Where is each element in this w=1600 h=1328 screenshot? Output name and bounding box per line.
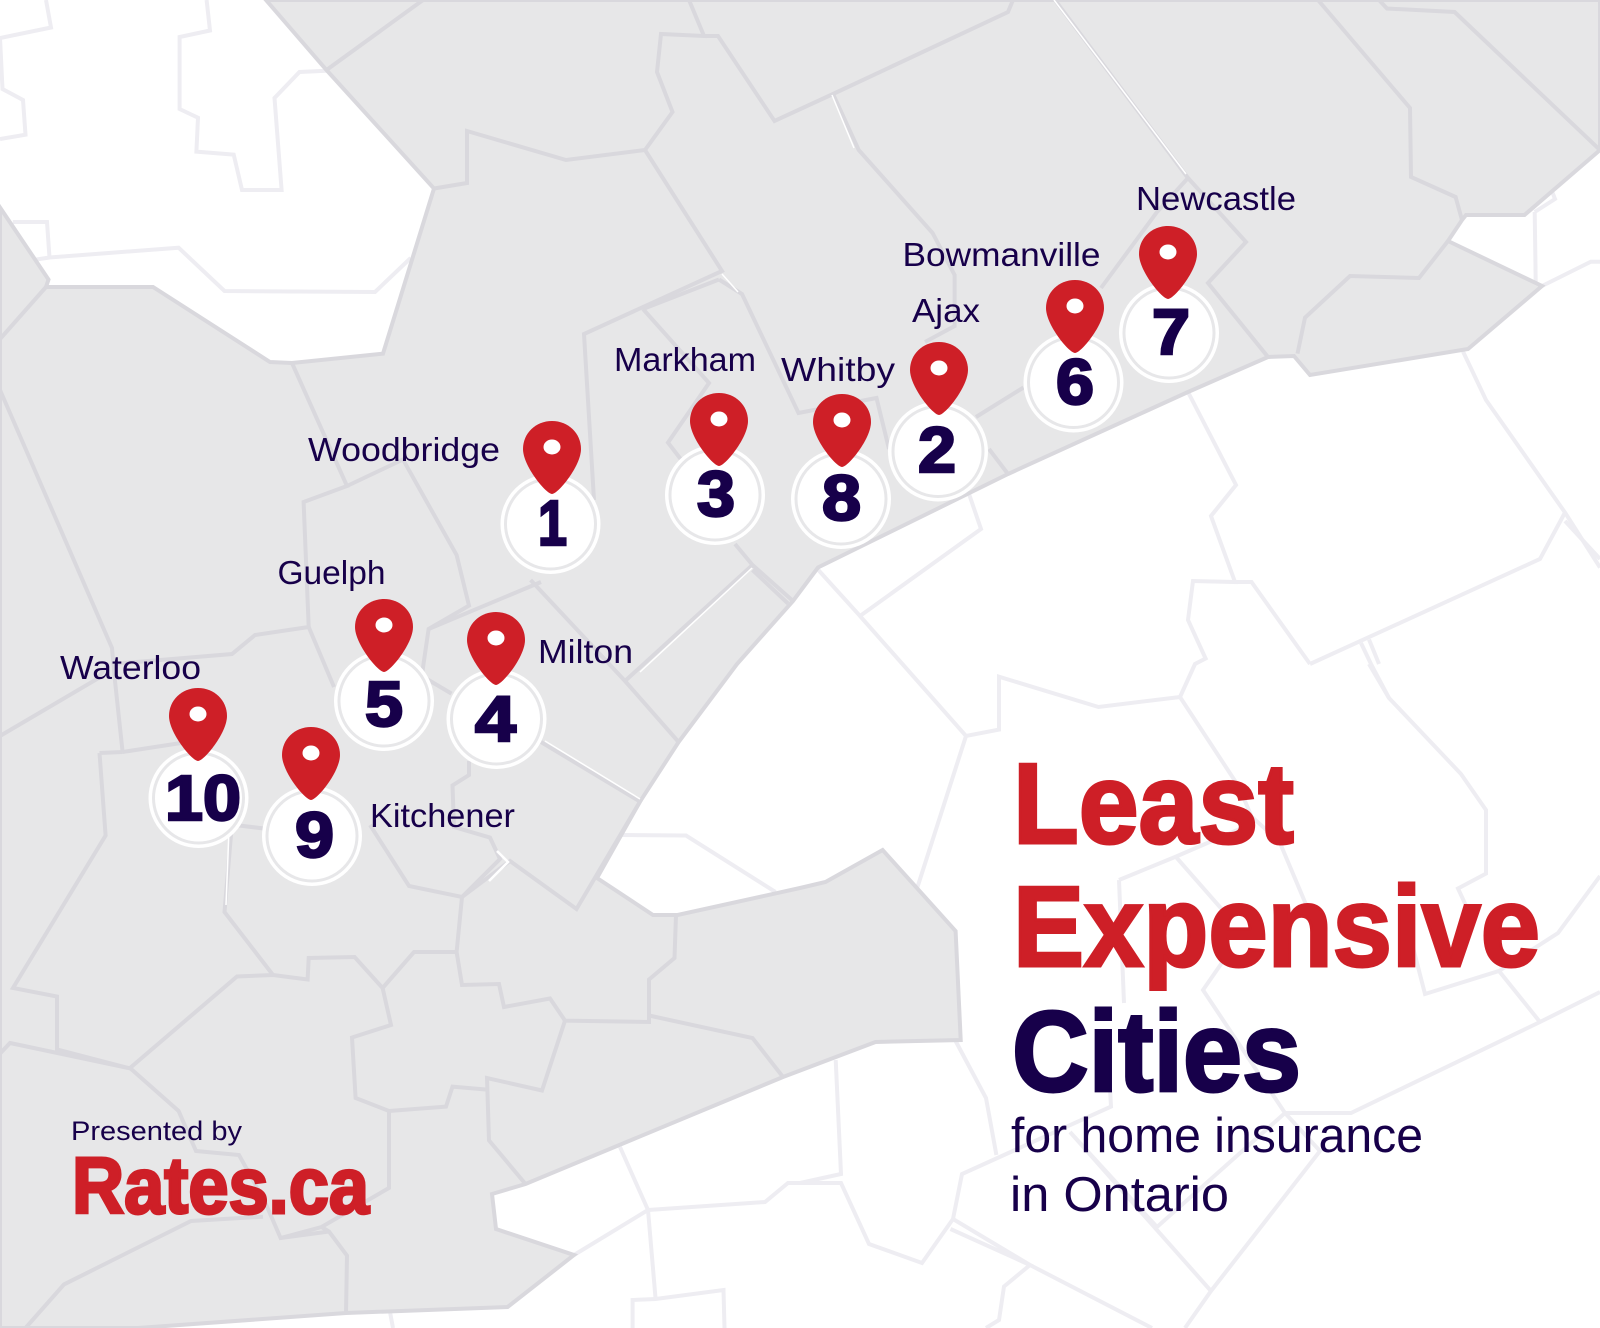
marker 7: Newcastle xyxy=(1120,180,1296,382)
marker 10: Waterloo: Waterloo xyxy=(60,649,201,686)
marker 9: Kitchener: Kitchener xyxy=(370,797,515,834)
title xyxy=(1012,741,1540,1116)
marker 3: Markham: 3 xyxy=(697,458,735,530)
marker 8: Whitby: Whitby xyxy=(781,351,896,388)
marker 10: Waterloo: 10 xyxy=(165,762,241,834)
marker 9: Kitchener: 9 xyxy=(295,799,334,871)
marker 8: Whitby xyxy=(781,351,896,548)
marker 5: Guelph xyxy=(278,554,432,750)
marker 2: Ajax: 2 xyxy=(918,414,956,486)
map: white slivers between grey regions xyxy=(226,0,1186,905)
marker 1: Woodbridge xyxy=(308,421,599,572)
subtitle: in Ontario xyxy=(1010,1168,1229,1222)
marker 6: Bowmanville: 6 xyxy=(1056,346,1094,418)
marker 4: Milton: 4 xyxy=(475,683,516,755)
marker 1: Woodbridge: 1 xyxy=(538,487,567,559)
marker 3: Markham xyxy=(614,341,764,544)
marker 7: Newcastle: 7 xyxy=(1152,296,1190,368)
marker 10: Waterloo xyxy=(60,649,247,846)
marker 6: Bowmanville: Bowmanville xyxy=(902,236,1100,273)
marker 8: Whitby: 8 xyxy=(822,462,861,534)
marker 6: Bowmanville xyxy=(902,236,1122,431)
marker 9: Kitchener xyxy=(264,727,515,884)
marker 2: Ajax: Ajax xyxy=(912,292,981,329)
title: Expensive xyxy=(1013,864,1540,991)
marker 3: Markham: Markham xyxy=(614,341,756,378)
marker 4: Milton xyxy=(448,612,633,768)
subtitle xyxy=(1010,1109,1423,1222)
title: Least xyxy=(1013,741,1294,868)
marker 5: Guelph: Guelph xyxy=(278,554,386,591)
title: Cities xyxy=(1012,989,1301,1116)
subtitle: for home insurance xyxy=(1011,1109,1423,1163)
marker 2: Ajax xyxy=(890,292,986,500)
marker 1: Woodbridge: Woodbridge xyxy=(308,431,500,468)
marker 4: Milton: Milton xyxy=(538,633,633,670)
marker 5: Guelph: 5 xyxy=(365,668,403,740)
marker 7: Newcastle: Newcastle xyxy=(1136,180,1296,217)
logo: Rates.ca: Rates.ca xyxy=(72,1141,369,1230)
presented by label: Presented by xyxy=(71,1116,243,1146)
